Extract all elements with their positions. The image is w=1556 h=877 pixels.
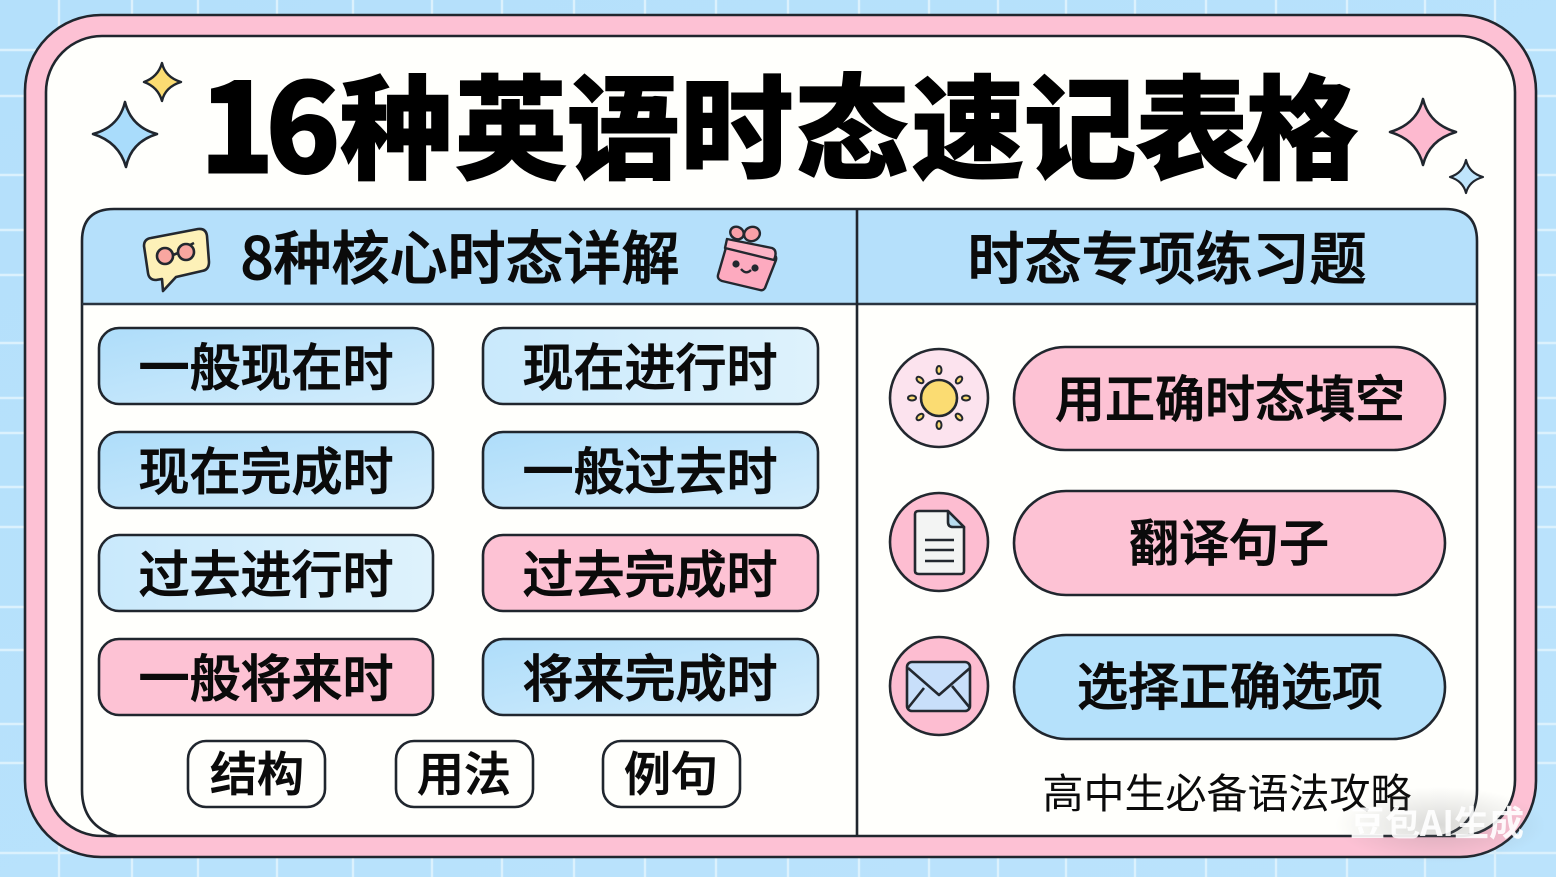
tag: example: 例句 [624,736,718,805]
button: past perfect: 过去完成时 [522,534,778,608]
icon: document [890,493,988,591]
icon: small blue sparkle [1450,160,1483,193]
icon: blue sparkle [93,102,157,167]
icon: speech bubble with glasses [144,229,209,291]
button: past simple: 一般过去时 [522,431,778,505]
tag: structure [188,736,325,807]
tag: example [603,736,740,807]
icon: yellow sparkle [144,63,181,101]
watermark: 豆包AI生成 [1350,796,1524,847]
pill: fill in the blank: 用正确时态填空 [1055,360,1405,432]
pill: choose the right option [1014,635,1445,739]
left header: 8种核心时态详解 [240,212,680,296]
button: past continuous: 过去进行时 [138,534,394,608]
title: 种英语时态速记表格 [340,39,1358,203]
pill: translate sentences [1014,491,1445,595]
button: present simple: 一般现在时 [138,327,394,401]
icon: envelope [890,637,988,735]
tag: usage: 用法 [417,736,511,805]
icon: smiling gift box [718,224,776,290]
icon: sun [890,349,988,447]
table panel [82,209,1477,836]
button: future perfect: 将来完成时 [522,638,778,712]
tag: usage [396,736,533,807]
icon: pink sparkle [1390,99,1456,165]
right header: 时态专项练习题 [968,214,1366,296]
pill: translate sentences: 翻译句子 [1129,504,1329,576]
button: future simple: 一般将来时 [138,638,394,712]
watermark [1335,787,1545,863]
button: present perfect: 现在完成时 [138,431,394,505]
button: present continuous: 现在进行时 [522,327,778,401]
tense buttons [99,327,818,715]
title: 16 [199,29,341,209]
tag: structure: 结构 [210,736,304,805]
pill: choose the right option: 选择正确选项 [1077,646,1383,720]
footer caption: 高中生必备语法攻略 [1042,760,1412,820]
pill: fill in the blank [1014,347,1445,450]
